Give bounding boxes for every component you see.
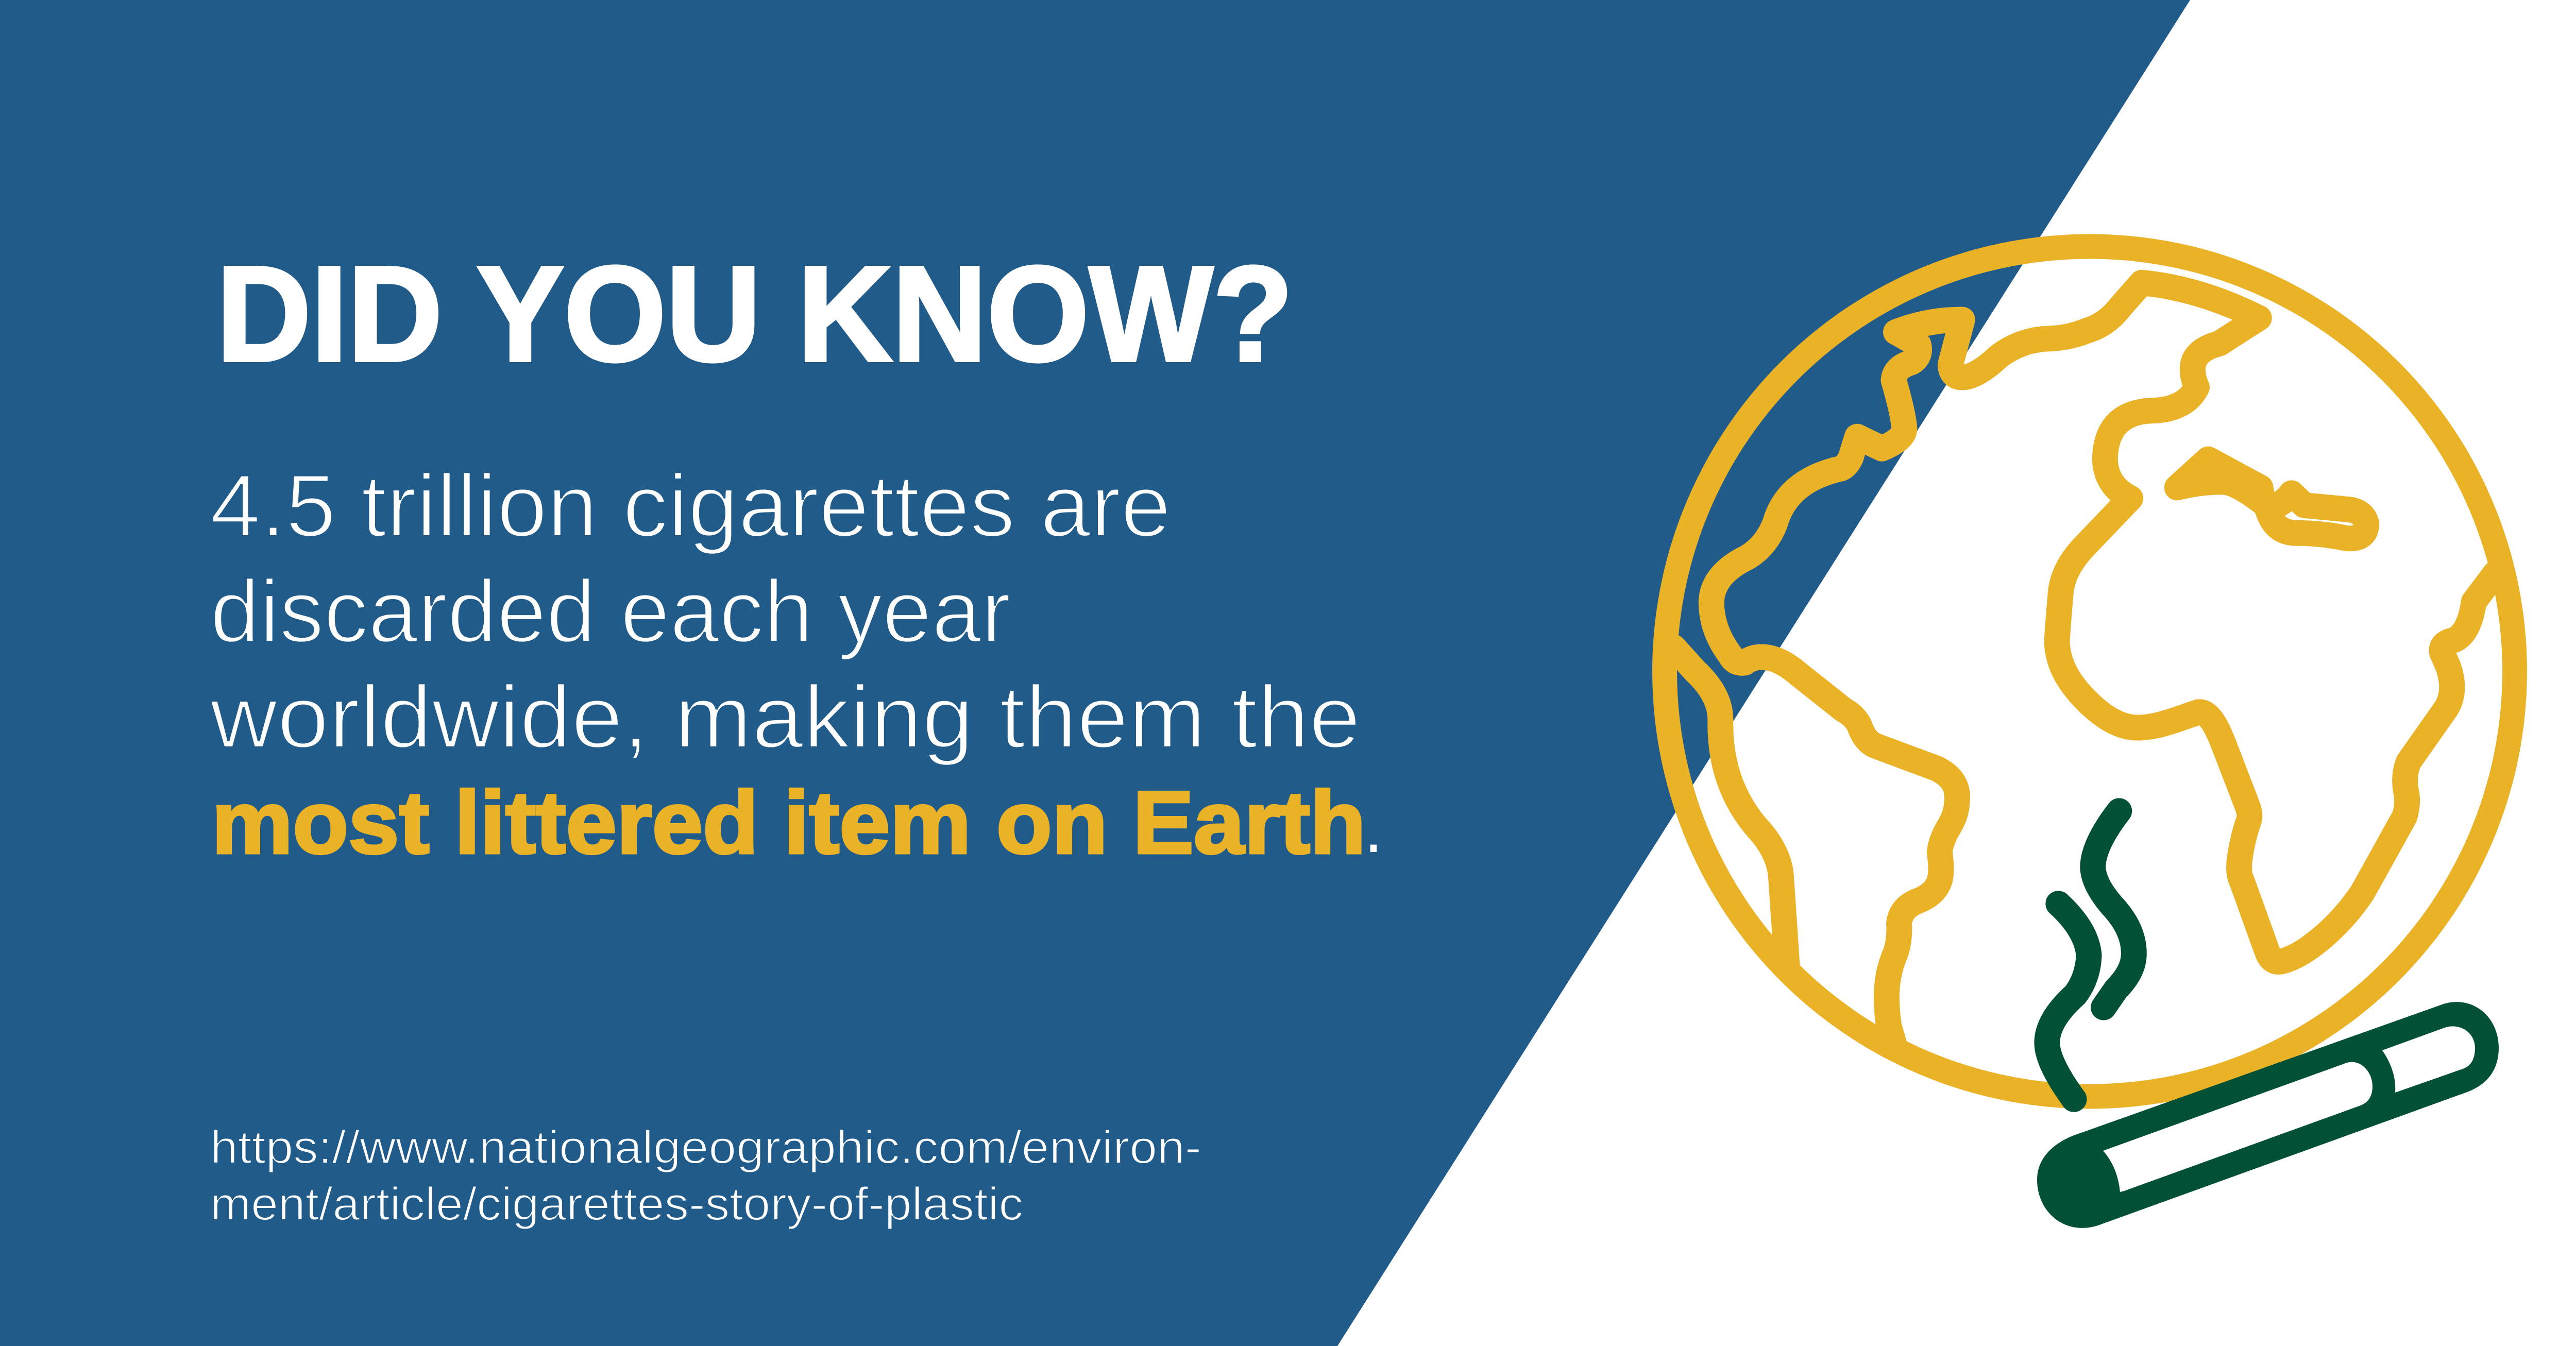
globe continents [1673, 283, 2495, 1046]
cigarette paper [2103, 1062, 2372, 1192]
statement final period: . [1361, 773, 1386, 872]
icon: cigarette [2037, 1002, 2499, 1228]
icon: globe [1665, 246, 2515, 1096]
statement line 1: 4.5 trillion cigarettes are [210, 456, 1171, 555]
smoke wisp right [2093, 811, 2134, 1008]
globe ring [1665, 246, 2515, 1096]
text block: main statement [210, 456, 1386, 872]
statement line 2: discarded each year [210, 562, 1011, 661]
continent: eastern loop [2266, 493, 2366, 538]
statement line 3: worldwide, making them the [210, 668, 1361, 766]
icon: smoke [2047, 811, 2134, 1099]
smoke wisp left [2047, 904, 2089, 1099]
source line 2: ment/article/cigarettes-story-of-plastic [210, 1179, 1023, 1230]
source line 1: https://www.nationalgeographic.com/environ- [210, 1122, 1201, 1173]
text block: source url [210, 1122, 1201, 1230]
statement line 4 highlight: most littered item on Earth [212, 773, 1366, 872]
cigarette filter [2382, 1026, 2475, 1093]
cigarette body outline [2037, 1002, 2499, 1228]
continent: western coast [1673, 647, 1787, 966]
heading: did you know: DID YOU KNOW? [216, 238, 1293, 389]
continent: main outline [1711, 283, 2495, 1046]
continent: filled sea wedge [2177, 459, 2263, 503]
